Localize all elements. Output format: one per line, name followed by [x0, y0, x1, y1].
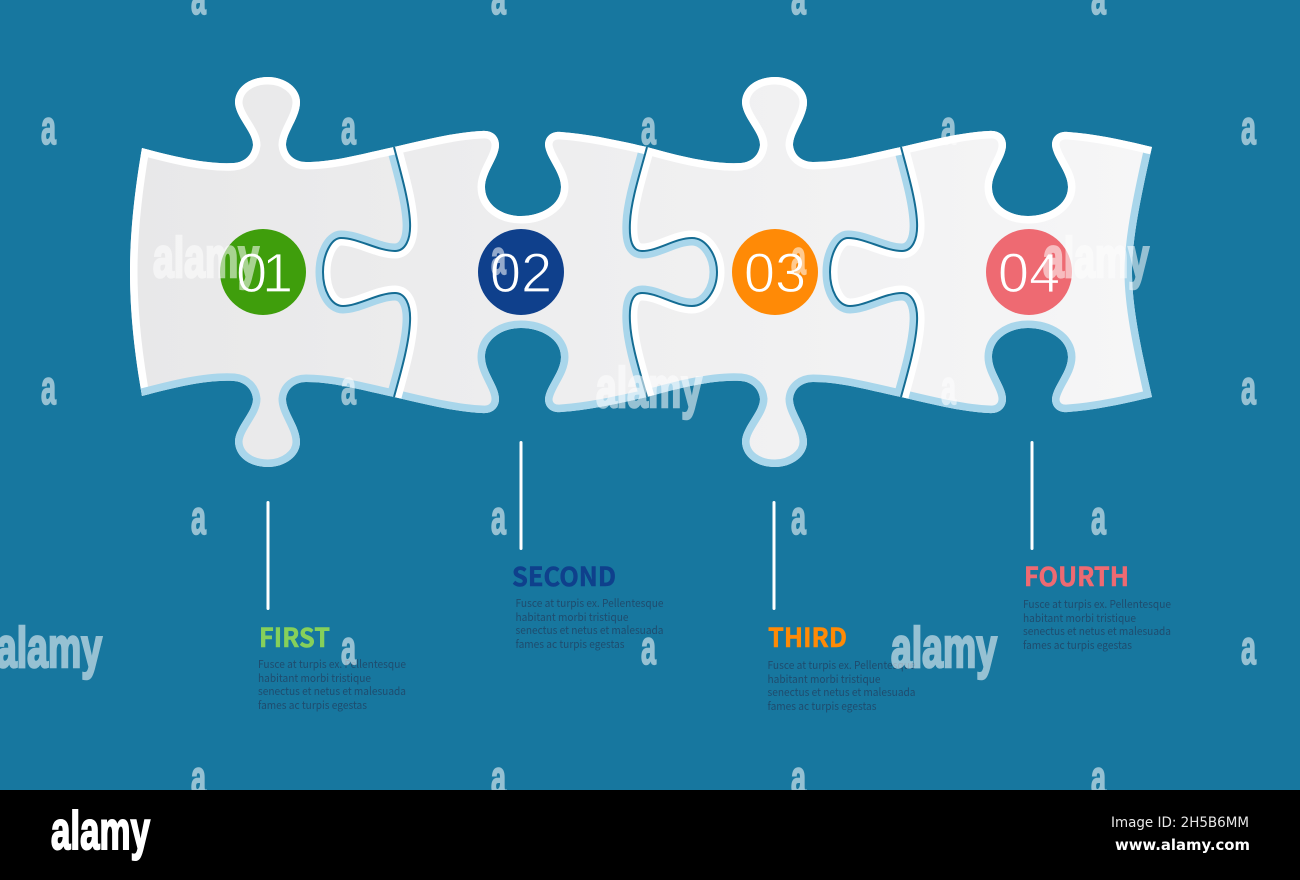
- text block: third: Fusce at turpis ex. Pellentesque: [768, 657, 916, 673]
- text block: fourth: Fusce at turpis ex. Pellentesque: [1023, 596, 1171, 612]
- text block: third: [768, 618, 916, 714]
- watermark: small letters: a: [191, 752, 206, 805]
- puzzle piece 1: [130, 77, 410, 467]
- watermark: small letters: a: [941, 102, 956, 155]
- text block: third: fames ac turpis egestas: [768, 698, 876, 714]
- text block: third: habitant morbi tristique: [768, 671, 880, 687]
- number badge 01: 01: [236, 241, 293, 304]
- watermark: small letters: a: [641, 102, 656, 155]
- watermark: large words: [0, 226, 1149, 680]
- watermark: small letters: a: [491, 752, 506, 805]
- watermark: small letters: a: [941, 362, 956, 415]
- text block: fourth: FOURTH: [1024, 557, 1129, 594]
- watermark: small letters: a: [341, 102, 356, 155]
- footer url: www.alamy.com: [1115, 836, 1250, 854]
- puzzle strip: [130, 77, 1152, 467]
- text block: second: fames ac turpis egestas: [516, 636, 624, 652]
- text block: first: fames ac turpis egestas: [258, 697, 367, 713]
- watermark: small letters: a: [791, 232, 806, 285]
- text block: fourth: habitant morbi tristique: [1023, 610, 1136, 626]
- connector line 1: [266, 501, 270, 610]
- watermark: small letters: a: [41, 102, 56, 155]
- watermark: small letters: a: [791, 752, 806, 805]
- number badge 04: [986, 229, 1072, 315]
- watermark: small letters: a: [341, 362, 356, 415]
- text block: fourth: fames ac turpis egestas: [1023, 637, 1132, 653]
- text block: fourth: [1023, 557, 1171, 653]
- watermark: small letters: a: [1241, 362, 1256, 415]
- text block: first: Fusce at turpis ex. Pellentesque: [258, 656, 406, 672]
- connector line 4: [1030, 441, 1034, 550]
- watermark: small letters: a: [1091, 492, 1106, 545]
- watermark: small letters: a: [1241, 622, 1256, 675]
- watermark: large words: alamy: [596, 356, 702, 420]
- footer image id: Image ID: 2H5B6MM: [1111, 815, 1249, 831]
- watermark: small letters: a: [1091, 752, 1106, 805]
- watermark: large words: alamy: [153, 226, 259, 290]
- number badge 03: [732, 229, 818, 315]
- text block: second: SECOND: [512, 557, 616, 594]
- puzzle piece 2: [323, 131, 717, 413]
- watermark: small letters: a: [791, 492, 806, 545]
- puzzle piece 4: [830, 131, 1152, 413]
- text block: third: THIRD: [768, 618, 847, 655]
- watermark: small letters: a: [491, 232, 506, 285]
- connector line 2: [520, 441, 522, 550]
- watermark: small letters: a: [191, 492, 206, 545]
- text block: third: senectus et netus et malesuada: [768, 684, 916, 700]
- watermark: large words: alamy: [891, 616, 997, 680]
- footer bar: [0, 790, 1300, 880]
- number badge 02: 02: [490, 241, 552, 304]
- puzzle piece 3: [630, 77, 917, 467]
- footer logo: alamy: [51, 801, 150, 861]
- text block: first: [258, 618, 406, 713]
- watermark: small letters: a: [41, 362, 56, 415]
- watermark: small letters: a: [341, 622, 356, 675]
- watermark: small letters: a: [491, 492, 506, 545]
- watermark: large words: alamy: [0, 616, 102, 680]
- watermark: small letters: a: [641, 622, 656, 675]
- text block: first: senectus et netus et malesuada: [258, 683, 406, 699]
- text block: fourth: senectus et netus et malesuada: [1023, 623, 1171, 639]
- number badge 03: 03: [744, 241, 806, 304]
- watermark: small letters: a: [1241, 102, 1256, 155]
- connector line 3: [772, 501, 776, 610]
- watermark: large words: alamy: [1043, 226, 1149, 290]
- text block: first: habitant morbi tristique: [258, 670, 371, 686]
- text block: second: senectus et netus et malesuada: [516, 622, 664, 638]
- text block: first: FIRST: [259, 618, 330, 655]
- number badge 04: 04: [998, 241, 1060, 304]
- seam lines between pieces: [323, 147, 917, 397]
- text block: second: [512, 557, 664, 652]
- text block: second: Fusce at turpis ex. Pellentesque: [516, 595, 664, 611]
- number badge 02: [478, 229, 564, 315]
- number badge 01: [220, 229, 306, 315]
- text block: second: habitant morbi tristique: [516, 609, 628, 625]
